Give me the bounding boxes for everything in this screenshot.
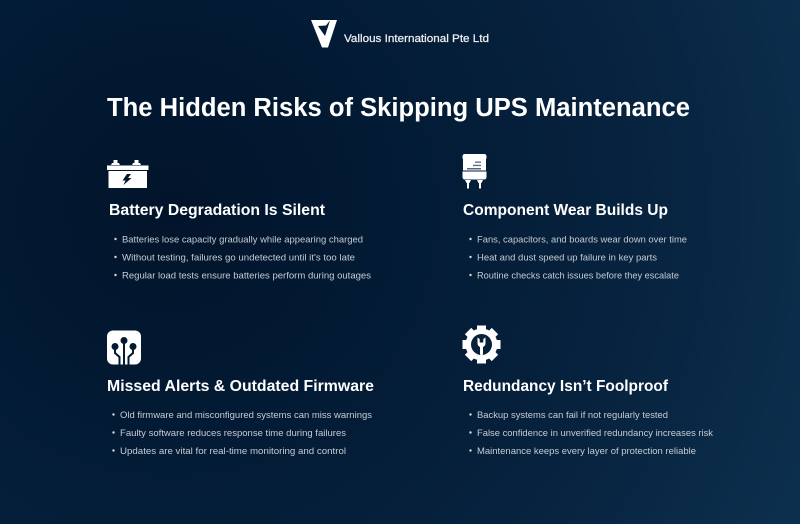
heading: Battery Degradation Is Silent bbox=[109, 202, 325, 219]
panel: missed alerts bbox=[107, 330, 374, 457]
bullet list: Regular load tests ensure batteries perform during outages bbox=[122, 270, 371, 282]
bullet list bbox=[469, 410, 713, 457]
heading: Component Wear Builds Up bbox=[463, 202, 668, 219]
bullet list: False confidence in unverified redundancy increases risk bbox=[477, 428, 713, 439]
bullet list: Backup systems can fail if not regularly tested bbox=[477, 410, 668, 421]
icon: gear with wrench bbox=[462, 326, 500, 364]
bullet list bbox=[112, 410, 372, 457]
panel: component wear bbox=[462, 154, 687, 282]
bullet list: Old firmware and misconfigured systems can miss warnings bbox=[120, 410, 372, 421]
logo: Vallous International bbox=[311, 20, 489, 48]
bullet list: Routine checks catch issues before they escalate bbox=[477, 270, 679, 282]
icon: battery bbox=[107, 160, 148, 188]
bullet list: Updates are vital for real-time monitoring and control bbox=[120, 446, 346, 457]
icon: V mark bbox=[311, 20, 337, 48]
heading: Redundancy Isn’t Foolproof bbox=[463, 378, 669, 395]
icon: circuit board bbox=[107, 330, 141, 364]
panel: redundancy bbox=[462, 326, 713, 457]
bullet list: Heat and dust speed up failure in key parts bbox=[477, 252, 657, 264]
bullet list: Fans, capacitors, and boards wear down over time bbox=[477, 234, 687, 246]
bullet list bbox=[114, 234, 371, 282]
panel: battery degradation bbox=[107, 160, 371, 282]
bullet list: Maintenance keeps every layer of protection reliable bbox=[477, 446, 696, 457]
company name: Vallous International Pte Ltd bbox=[344, 33, 489, 45]
title: The Hidden Risks of Skipping UPS Maintenance bbox=[107, 94, 690, 122]
bullet list bbox=[469, 234, 687, 282]
icon: capacitor component bbox=[462, 154, 486, 188]
bullet list: Batteries lose capacity gradually while appearing charged bbox=[122, 234, 363, 246]
bullet list: Faulty software reduces response time during failures bbox=[120, 428, 346, 439]
bullet list: Without testing, failures go undetected until it's too late bbox=[122, 252, 355, 264]
heading: Missed Alerts & Outdated Firmware bbox=[107, 378, 374, 395]
